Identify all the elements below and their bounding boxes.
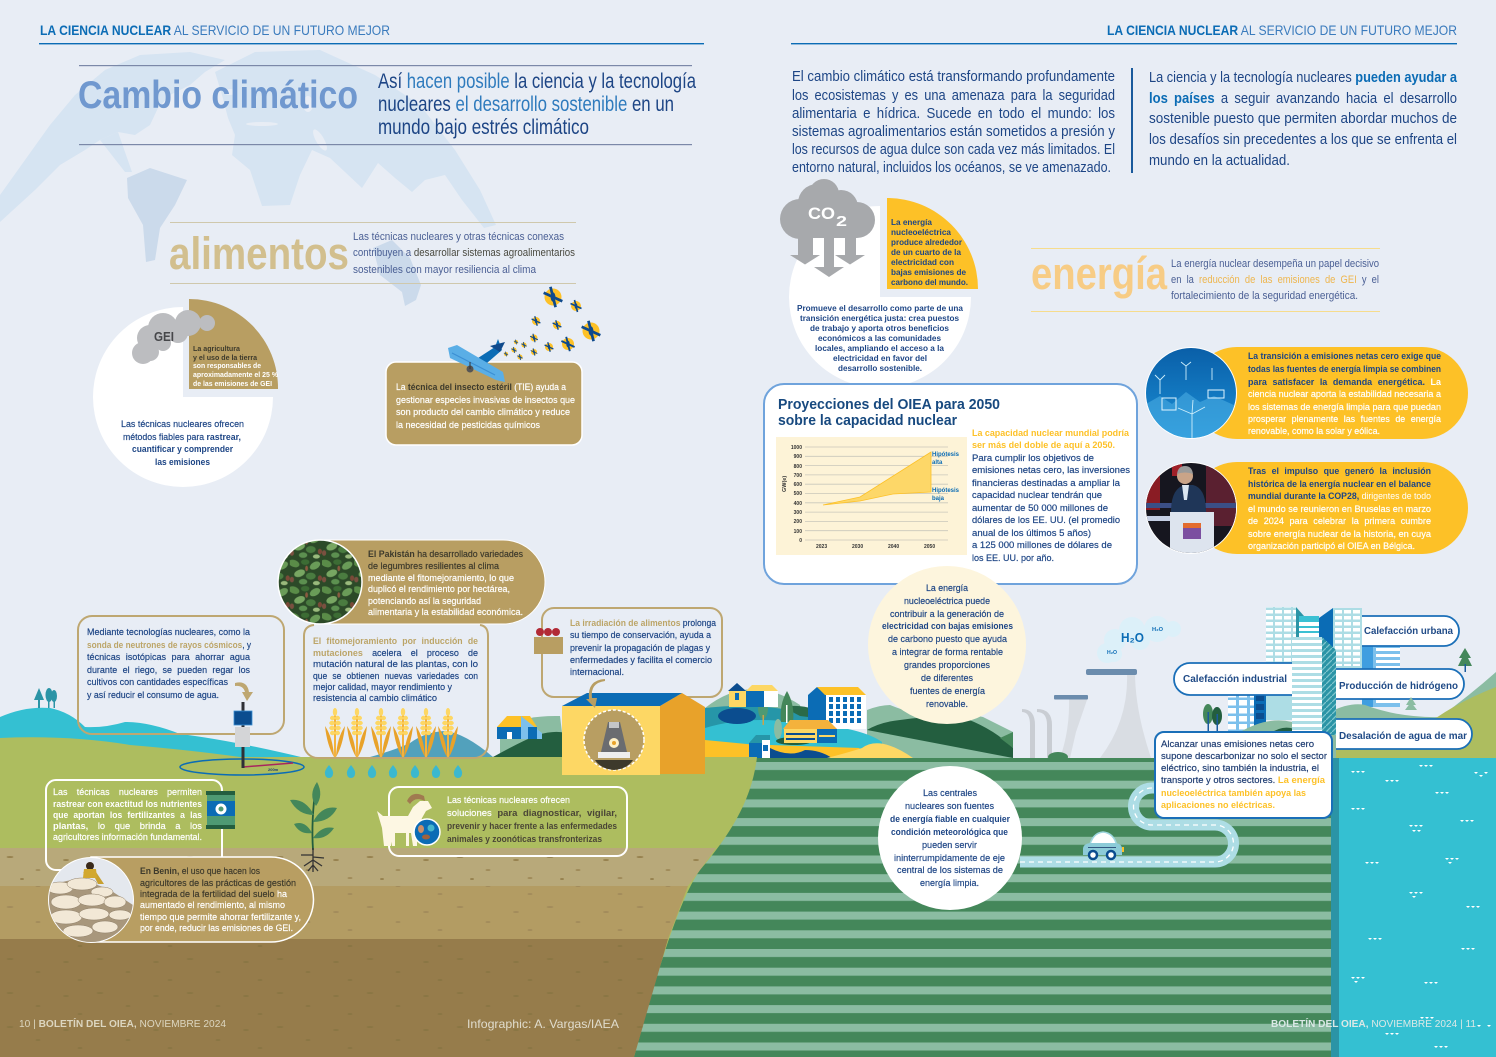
label: calefacción urbana (1362, 616, 1459, 646)
right intro column: sostenible puesto que permiten abordar muchos de (1149, 110, 1457, 127)
nuclear share quadrant: carbono del mundo. (891, 277, 968, 287)
circle: low-carbon electricity: La energía (926, 582, 969, 593)
icon: H2O steam cloud: H₂O (1121, 631, 1144, 645)
projections title: sobre la capacidad nuclear (778, 413, 957, 429)
circle: reliable energy (878, 766, 1022, 910)
panel: clean energy pill: renovable, como la solar y eólica. (1248, 426, 1380, 436)
panel: plant mutation box: resistencia al cambio climático (313, 692, 437, 703)
panel: goat / animal disease box: soluciones para diagnosticar, vigilar, (447, 807, 617, 818)
right intro paragraph: El cambio climático está transformando profundamente (792, 68, 1115, 85)
nuclear share quadrant (887, 198, 978, 289)
panel: goat / animal disease box: prevenir y hacer frente a las enfermedades (447, 820, 617, 831)
panel: COP28 pill: organización participó el OIEA en Bélgica. (1248, 541, 1415, 551)
line chart: 500 (794, 491, 802, 497)
circle text: Promueve el desarrollo como parte de una (797, 303, 963, 313)
panel: Benin pill: por ende, reducir las emisiones de GEI. (140, 922, 293, 933)
panel: Benin pill: En Benin, el uso que hacen los (140, 865, 260, 876)
icon: trees (1203, 648, 1472, 732)
right intro paragraph (792, 68, 1115, 176)
circle text (121, 418, 244, 467)
heading: energía: energía (1031, 248, 1168, 299)
circle: low-carbon electricity: contribuir a la generación de (890, 608, 1004, 619)
panel: clean energy pill: La transición a emisiones netas cero exige que (1248, 351, 1441, 361)
icon: wheat (325, 708, 458, 757)
panel: plant mutation box: El fitomejoramiento por inducción de (313, 635, 478, 646)
landscape: power plant hills (867, 705, 1013, 758)
icon: CO2 cloud with arrows: CO (808, 204, 835, 223)
panel: nutrient tracking box (46, 780, 235, 870)
panel: neutron probe box: y así reducir el consumo de agua. (87, 689, 219, 700)
panel: net zero box: nucleoeléctrica también apoya las (1161, 787, 1306, 798)
landscape: right hills (1240, 672, 1496, 758)
projections title: Proyecciones del OIEA para 2050 (778, 397, 1000, 413)
projections title (778, 397, 1000, 429)
right intro column: La ciencia y la tecnología nucleares pueden ayudar a (1149, 69, 1458, 86)
circle: low-carbon electricity: electricidad con bajas emisiones (882, 620, 1013, 631)
circle text: métodos fiables para rastrear, (123, 431, 241, 442)
line chart: 300 (794, 510, 802, 516)
circle text: cuantificar y comprender (132, 443, 233, 454)
projection text: financieras destinadas a ampliar la (972, 477, 1121, 488)
right intro column: los desafíos sin precedentes a los que se enfrenta el (1149, 131, 1457, 148)
circle text: de trabajo y aporta otros beneficios (810, 323, 949, 333)
panel: neutron probe box (78, 616, 284, 734)
circle text: locales, ampliando el acceso a la (815, 343, 944, 353)
panel: food irradiation box: La irradiación de alimentos prolonga (570, 617, 717, 628)
panel: net zero box: eléctrico, sino también la industria, el (1161, 762, 1319, 773)
icon: cooling towers (1022, 669, 1151, 762)
projection text: La capacidad nuclear mundial podría (972, 427, 1130, 438)
panel: COP28 pill: mundial durante la COP28, dirigentes de todo (1248, 491, 1431, 501)
landscape: left hills (0, 688, 565, 758)
panel: COP28 pill: el mundo se reunieron en Bruselas en marzo (1248, 504, 1431, 514)
photo: legumes (278, 540, 362, 624)
footer right: BOLETÍN DEL OIEA, NOVIEMBRE 2024 | 11 (1271, 1017, 1476, 1030)
agriculture quadrant: La agricultura (193, 346, 240, 353)
icon: seedling (290, 782, 337, 872)
icon: GEI cloud (132, 310, 215, 364)
circle: low-carbon electricity: de diferentes (921, 672, 973, 683)
label: desalación (1336, 719, 1472, 749)
panel: net zero box: Alcanzar unas emisiones netas cero (1161, 738, 1314, 749)
panel: nutrient tracking box: que aportan los fertilizantes a las (53, 809, 202, 820)
panel: COP28 pill: sobre energía nuclear de la historia, en cuya (1248, 529, 1431, 539)
panel: clean energy pill (1145, 347, 1468, 440)
projection text (972, 427, 1130, 563)
heading: alimentos (169, 222, 576, 284)
circle: reliable energy: central de los sistemas de (897, 864, 1003, 875)
circle text (797, 303, 963, 373)
panel: Pakistan pill: de legumbres resilientes al clima (368, 560, 500, 571)
circle: reliable energy: pueden servir (922, 839, 977, 850)
panel: COP28 pill (1145, 462, 1468, 554)
icon: goat (377, 794, 440, 846)
icon: fertilizer bag (206, 791, 235, 829)
right intro column: los países a seguir avanzando hacia el desarrollo (1149, 90, 1457, 107)
heading: alimentos: Las técnicas nucleares y otras técnicas conexas (353, 231, 564, 243)
nuclear share quadrant: produce alrededor (891, 237, 963, 247)
back buildings (1228, 607, 1400, 732)
heading: energía (1031, 248, 1380, 312)
panel: nutrient tracking box: agricultores información fundamental. (53, 831, 202, 842)
panel: COP28 pill: Tras el impulso que generó la inclusión (1248, 466, 1431, 476)
panel: food irradiation box (534, 608, 722, 697)
heading: alimentos: alimentos (169, 228, 349, 279)
projection text: los EE. UU. por año. (972, 552, 1054, 563)
icon: neutron probe: 200m (268, 767, 279, 772)
circle: reliable energy: ininterrumpidamente de eje (894, 852, 1005, 863)
panel: Pakistan pill: alimentaria y la estabilidad económica. (368, 606, 523, 617)
line chart (776, 437, 967, 555)
line chart: Hipótesis (932, 488, 960, 494)
line chart: alta (932, 460, 943, 466)
circle: low-carbon electricity: fuentes de energía (910, 685, 986, 696)
line chart: 200 (794, 519, 802, 525)
projection text: ser más del doble de aquí a 2050. (972, 439, 1115, 450)
header right: LA CIENCIA NUCLEAR AL SERVICIO DE UN FUTURO MEJOR (1107, 22, 1457, 38)
arrow: to barn (586, 679, 605, 708)
circle: low-carbon electricity: nucleoeléctrica puede (904, 595, 990, 606)
line chart: 900 (794, 454, 802, 460)
ground: left field and soil (0, 737, 757, 1057)
panel: sterile insect technique: La técnica del insecto estéril (TIE) ayuda a (396, 381, 567, 392)
heading: energía: La energía nuclear desempeña un papel decisivo (1171, 258, 1379, 270)
circle: reliable energy: de energía fiable en cualquier (890, 813, 1010, 824)
heading: energía: fortalecimiento de la seguridad energética. (1171, 290, 1358, 302)
panel: net zero box: aplicaciones no eléctricas. (1161, 799, 1275, 810)
projection text: emisiones netas cero, las inversiones (972, 464, 1130, 475)
panel: GEI circle (93, 299, 279, 487)
circle text: Las técnicas nucleares ofrecen (121, 418, 244, 429)
panel: CO2 circle (780, 179, 978, 388)
line chart: 600 (794, 482, 802, 488)
title block (78, 65, 696, 145)
label: producción de hidrógeno: Producción de hidrógeno (1339, 681, 1458, 692)
panel: goat / animal disease box: animales y zoonóticas transfronterizas (447, 833, 602, 844)
projection text: dólares de los EE. UU. (el promedio (972, 514, 1120, 525)
panel: Benin pill: aumentado el rendimiento, al mismo (140, 899, 285, 910)
arrow: to probe (235, 682, 253, 701)
agriculture quadrant: y el uso de la tierra (193, 355, 257, 362)
icon: CO2 cloud with arrows (780, 179, 875, 277)
panel: clean energy pill: ciencia nuclear aporta la estabilidad necesaria a (1248, 389, 1441, 399)
panel: Benin pill: agricultores de las prácticas de gestión (140, 877, 296, 888)
icon: H2O steam cloud (1097, 616, 1181, 663)
panel: Pakistan pill: mediante el fitomejoramiento, lo que (368, 572, 514, 583)
projection text: aumentar de 50 000 millones de (972, 502, 1108, 513)
projection text: a 125 000 millones de dólares de (972, 539, 1112, 550)
projection text: anual de los últimos 5 años) (972, 527, 1091, 538)
icon: biplane and insects (448, 287, 600, 382)
icon: H2O steam cloud: H₂O (1107, 650, 1118, 656)
circle: reliable energy: condición meteorológica que (891, 826, 1008, 837)
panel: food irradiation box: enfermedades y facilita el comercio (570, 654, 712, 665)
panel: neutron probe box: Mediante tecnologías nucleares, como la (87, 626, 251, 637)
circle: reliable energy: Las centrales (923, 787, 977, 798)
panel: sterile insect technique: son producto del cambio climático y reduce (396, 406, 570, 417)
panel: nutrient tracking box: Las técnicas nucleares permiten (53, 786, 202, 797)
nuclear share quadrant: nucleoeléctrica (891, 227, 951, 237)
circle text: electricidad en favor del (833, 353, 927, 363)
nuclear share quadrant: electricidad con (891, 257, 954, 267)
panel: Pakistan pill: duplicó el rendimiento por hectárea, (368, 583, 510, 594)
line chart: 100 (794, 529, 802, 535)
icon: car (1083, 832, 1124, 859)
footer left: 10 | BOLETÍN DEL OIEA, NOVIEMBRE 2024 (19, 1017, 226, 1030)
heading: alimentos: contribuyen a desarrollar sistemas agroalimentarios (353, 247, 575, 259)
heading: alimentos: sostenibles con mayor resiliencia al clima (353, 264, 537, 276)
nuclear share quadrant: La energía (891, 217, 932, 227)
icon: water drops (325, 765, 462, 778)
panel: Pakistan pill: El Pakistán ha desarrollado variedades (368, 548, 523, 559)
panel: sterile insect technique: gestionar especies invasivas de insectos que (396, 394, 575, 405)
icon: neutron probe (180, 702, 304, 775)
label: calefacción urbana: Calefacción urbana (1364, 626, 1453, 637)
agriculture quadrant: de las emisiones de GEI (193, 381, 272, 388)
title block: Cambio climático (78, 74, 358, 117)
panel: neutron probe box: técnicas isotópicas para ahorrar agua (87, 651, 251, 662)
title block: nucleares el desarrollo sostenible en un (378, 93, 674, 116)
panel: COP28 pill: histórica de la energía nuclear en el balance (1248, 479, 1431, 489)
agriculture quadrant: son responsables de (193, 363, 261, 370)
icon: GEI cloud: GEI (154, 329, 174, 344)
circle text: transición energética justa: crea puestos (800, 313, 959, 323)
panel: neutron probe box: durante el riego, se pueden regar los (87, 664, 250, 675)
panel: Benin pill (47, 857, 314, 943)
panel: COP28 pill: de 2024 para celebrar la primera cumbre (1248, 516, 1431, 526)
panel: plant mutation box: que se obtienen nuevas variedades con (313, 670, 478, 681)
right intro column (1131, 68, 1458, 173)
photo: speaker at podium (1145, 462, 1238, 554)
panel: neutron probe box: cultivos con cantidades específicas (87, 676, 228, 687)
circle: low-carbon electricity: de carbono puesto que ayuda (888, 633, 1008, 644)
label: producción de hidrógeno (1336, 669, 1464, 699)
panel: food irradiation box: internacional. (570, 666, 624, 677)
nuclear share quadrant: de un cuarto de la (891, 247, 961, 257)
line chart: 400 (794, 501, 802, 507)
circle: low-carbon electricity (868, 566, 1026, 724)
circle text: las emisiones (155, 456, 210, 467)
panel: Benin pill: integrada de la fertilidad del suelo ha (140, 888, 288, 899)
title block: mundo bajo estrés climático (378, 116, 589, 139)
line chart: 2030 (852, 544, 863, 550)
panel: food irradiation box: prevenir la propagación de plagas y (570, 642, 710, 653)
circle: reliable energy: energía limpia. (920, 877, 979, 888)
label: calefacción industrial (1174, 663, 1292, 695)
world map backdrop (0, 50, 496, 306)
line chart: GW(e) (782, 476, 788, 492)
heading: energía: en la reducción de las emisiones de GEI y el (1171, 274, 1379, 286)
line chart: 800 (794, 464, 802, 470)
landscape: village (705, 683, 913, 758)
projection text: capacidad nuclear tendrán que (972, 489, 1102, 500)
panel: plant mutation box: mejor calidad, mayor rendimiento y (313, 681, 452, 692)
panel: Benin pill: tiempo que permite ahorrar fertilizante y, (140, 911, 301, 922)
road (1020, 788, 1234, 862)
circle text: económicos a las comunidades (818, 333, 941, 343)
panel: plant mutation box: mutaciones acelera el proceso de (313, 647, 478, 658)
circle: low-carbon electricity: renovable. (926, 698, 968, 709)
right intro paragraph: alimentaria e hídrica. Sucede en todo el mundo: los (792, 105, 1115, 122)
right intro paragraph: sistemas agroalimentarios están sometidos a presión y (792, 123, 1115, 140)
panel: Pakistan pill: potenciando así la seguridad (368, 595, 481, 606)
panel: sterile insect technique: la necesidad de pesticidas químicos (396, 419, 540, 430)
circle: reliable energy: nucleares son fuentes (905, 800, 994, 811)
agriculture quadrant (189, 299, 279, 389)
circle text: desarrollo sostenible. (838, 363, 922, 373)
header left: LA CIENCIA NUCLEAR AL SERVICIO DE UN FUTURO MEJOR (40, 22, 390, 38)
panel: plant mutation box: mutación natural de las plantas, con lo (313, 658, 478, 669)
panel: goat / animal disease box (377, 787, 627, 856)
right intro column: mundo en la actualidad. (1149, 152, 1290, 169)
agriculture quadrant: aproximadamente el 25 % (193, 372, 279, 379)
line chart: 1000 (791, 445, 802, 451)
photo: fertilizer sacks (47, 857, 134, 943)
ground: sea (1331, 758, 1496, 1057)
icon: crate of tomatoes (534, 628, 563, 654)
village houses (728, 683, 866, 758)
line chart: 2040 (888, 544, 899, 550)
panel: nutrient tracking box: plantas, lo que brinda a los (53, 820, 202, 831)
panel: net zero box: transporte y otros sectores. La energía (1161, 774, 1326, 785)
panel: clean energy pill: prosperar plenamente las fuentes de energía (1248, 414, 1441, 424)
right intro paragraph: los recursos de agua dulce son cada vez más limitados. El (792, 141, 1115, 158)
nuclear share quadrant: bajas emisiones de (891, 267, 966, 277)
panel: net zero box (1155, 732, 1332, 818)
panel: clean energy pill: para satisfacer la demanda energética. La (1248, 377, 1441, 387)
credit: Infographic: A. Vargas/IAEA (467, 1017, 619, 1031)
icon: CO2 cloud with arrows: 2 (836, 213, 847, 230)
panel: Pakistan pill (278, 540, 545, 624)
line chart: 2050 (924, 544, 935, 550)
panel: plant mutation box (304, 625, 488, 758)
right intro paragraph: entorno natural, incluidos los océanos, se ve amenazado. (792, 159, 1111, 176)
panel: neutron probe box: sonda de neutrones de rayos cósmicos, y (87, 639, 251, 650)
icon: barn with irradiator (562, 693, 705, 775)
right intro paragraph: los ecosistemas y es una amenaza para la seguridad (792, 87, 1115, 104)
title block: Así hacen posible la ciencia y la tecnología (378, 70, 696, 93)
panel: nutrient tracking box: rastrear con exactitud los nutrientes (53, 798, 202, 809)
ground: stripes field (600, 758, 1340, 1057)
label: calefacción industrial: Calefacción industrial (1183, 674, 1287, 685)
line chart: 2023 (816, 544, 827, 550)
panel: sterile insect technique (386, 362, 582, 445)
panel: clean energy pill: los sistemas de energía limpia para que puedan (1248, 402, 1441, 412)
circle: low-carbon electricity: grandes proporciones (904, 659, 990, 670)
panel: clean energy pill: todas las fuentes de energía limpia se combinen (1248, 364, 1441, 374)
projection text: Para cumplir los objetivos de (972, 452, 1094, 463)
line chart: Hipótesis (932, 452, 960, 458)
line chart: baja (932, 496, 945, 502)
front building (1292, 637, 1336, 735)
panel: food irradiation box: su tiempo de conservación, ayuda a (570, 629, 712, 640)
icon: H2O steam cloud: H₂O (1152, 627, 1164, 633)
circle: low-carbon electricity: a integrar de forma rentable (892, 646, 1003, 657)
label: desalación: Desalación de agua de mar (1339, 731, 1467, 742)
photo: wind turbines (1145, 347, 1237, 440)
panel: net zero box: supone descarbonizar no solo el sector (1161, 750, 1327, 761)
line chart: 700 (794, 473, 802, 479)
panel: projections (764, 384, 1137, 584)
line chart: 0 (799, 538, 802, 544)
small houses left (497, 716, 542, 739)
panel: goat / animal disease box: Las técnicas nucleares ofrecen (447, 794, 570, 805)
